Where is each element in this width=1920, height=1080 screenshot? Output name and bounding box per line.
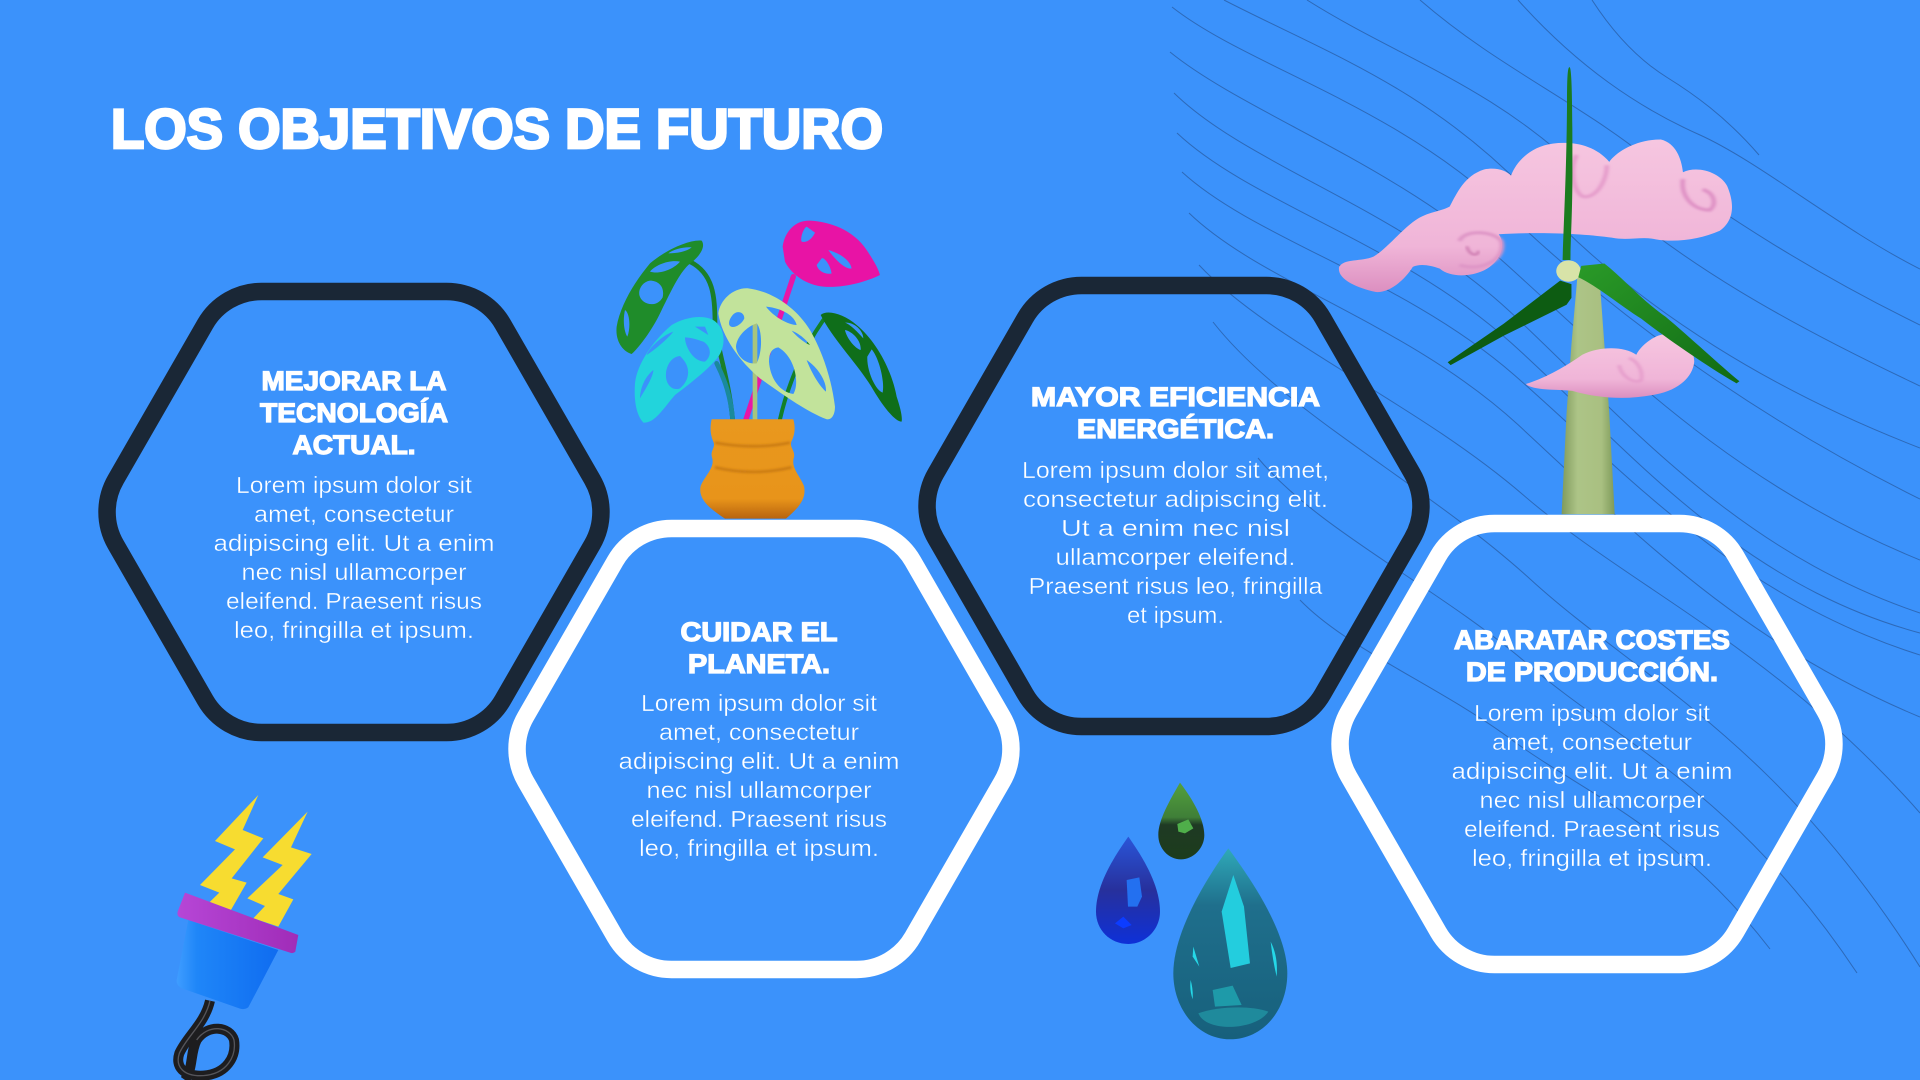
plug body	[177, 920, 278, 1009]
body text: nec nisl ullamcorper	[1480, 787, 1705, 813]
plant stems	[690, 262, 823, 419]
heading	[1454, 625, 1730, 687]
body text: Lorem ipsum dolor sit amet,	[1022, 457, 1329, 483]
plug cap	[177, 893, 298, 953]
body text: amet, consectetur	[254, 501, 454, 527]
hexagon outline white	[1340, 524, 1834, 964]
hexagon outline white	[517, 528, 1011, 970]
body text	[1022, 457, 1329, 628]
heading: ENERGÉTICA.	[1077, 413, 1274, 444]
body text: leo, fringilla et ipsum.	[234, 617, 474, 643]
green drop	[1158, 783, 1204, 859]
heading: ACTUAL.	[292, 430, 416, 460]
hexagon outline dark	[927, 286, 1421, 726]
right blade	[1578, 263, 1739, 383]
heading: MAYOR EFICIENCIA	[1031, 382, 1320, 412]
heading: CUIDAR EL	[680, 617, 838, 647]
hexagon outline dark	[107, 292, 601, 732]
illustration: water drops	[1096, 783, 1287, 1039]
left blade	[1448, 281, 1571, 365]
teal drop	[1173, 848, 1287, 1039]
illustration: wind turbine with pink clouds	[1339, 67, 1739, 514]
body text: Lorem ipsum dolor sit	[641, 690, 878, 716]
teal leaf	[635, 317, 724, 423]
body text: adipiscing elit. Ut a enim	[618, 748, 900, 774]
heading	[260, 366, 448, 460]
dark green leaf	[821, 312, 902, 422]
body text: leo, fringilla et ipsum.	[1472, 845, 1712, 871]
blue drop	[1096, 837, 1160, 944]
panel: mayor eficiencia energetica	[927, 286, 1421, 726]
body text: consectetur adipiscing elit.	[1023, 486, 1328, 512]
body text	[1452, 700, 1732, 871]
illustration: potted monstera plant	[616, 221, 902, 519]
turbine tower	[1562, 277, 1615, 514]
upper cloud	[1339, 139, 1732, 292]
body text: leo, fringilla et ipsum.	[639, 835, 879, 861]
body text: nec nisl ullamcorper	[242, 559, 467, 585]
heading: ABARATAR COSTES	[1454, 625, 1730, 655]
body text: eleifend. Praesent risus	[226, 588, 482, 614]
body text: Praesent risus leo, fringilla	[1028, 573, 1323, 599]
lower cloud	[1526, 334, 1694, 398]
body text: eleifend. Praesent risus	[631, 806, 887, 832]
heading: DE PRODUCCIÓN.	[1466, 656, 1718, 687]
body text: Lorem ipsum dolor sit	[236, 472, 473, 498]
heading: PLANETA.	[688, 649, 830, 679]
body text: ullamcorper eleifend.	[1056, 544, 1296, 570]
green leaf	[616, 241, 703, 354]
lightning bolts	[200, 795, 312, 927]
panel: cuidar el planeta	[517, 528, 1011, 970]
plug cable	[178, 1001, 234, 1080]
illustration: electric plug with lightning bolts	[177, 795, 312, 1080]
body text	[618, 690, 900, 861]
body text: eleifend. Praesent risus	[1464, 816, 1720, 842]
title: LOS OBJETIVOS DE FUTURO	[111, 97, 883, 160]
panel: mejorar la tecnologia	[107, 292, 601, 732]
body text: nec nisl ullamcorper	[646, 777, 872, 803]
body text: Lorem ipsum dolor sit	[1474, 700, 1711, 726]
upper blade	[1563, 67, 1572, 260]
body text: adipiscing elit. Ut a enim	[214, 530, 494, 556]
pink leaf	[783, 221, 880, 287]
heading	[680, 617, 838, 679]
body text	[214, 472, 494, 643]
heading	[1031, 382, 1320, 444]
body text: Ut a enim nec nisl	[1061, 515, 1290, 541]
body text: amet, consectetur	[659, 719, 859, 745]
light green leaf	[718, 288, 835, 419]
background wavy contour lines	[1170, 0, 1920, 973]
heading: MEJORAR LA	[262, 366, 446, 396]
body text: et ipsum.	[1127, 602, 1224, 628]
heading: TECNOLOGÍA	[260, 397, 448, 428]
panel: abaratar costes de produccion	[1340, 524, 1834, 964]
body text: adipiscing elit. Ut a enim	[1452, 758, 1732, 784]
body text: amet, consectetur	[1492, 729, 1692, 755]
turbine hub	[1556, 260, 1581, 282]
orange pot	[700, 419, 805, 519]
